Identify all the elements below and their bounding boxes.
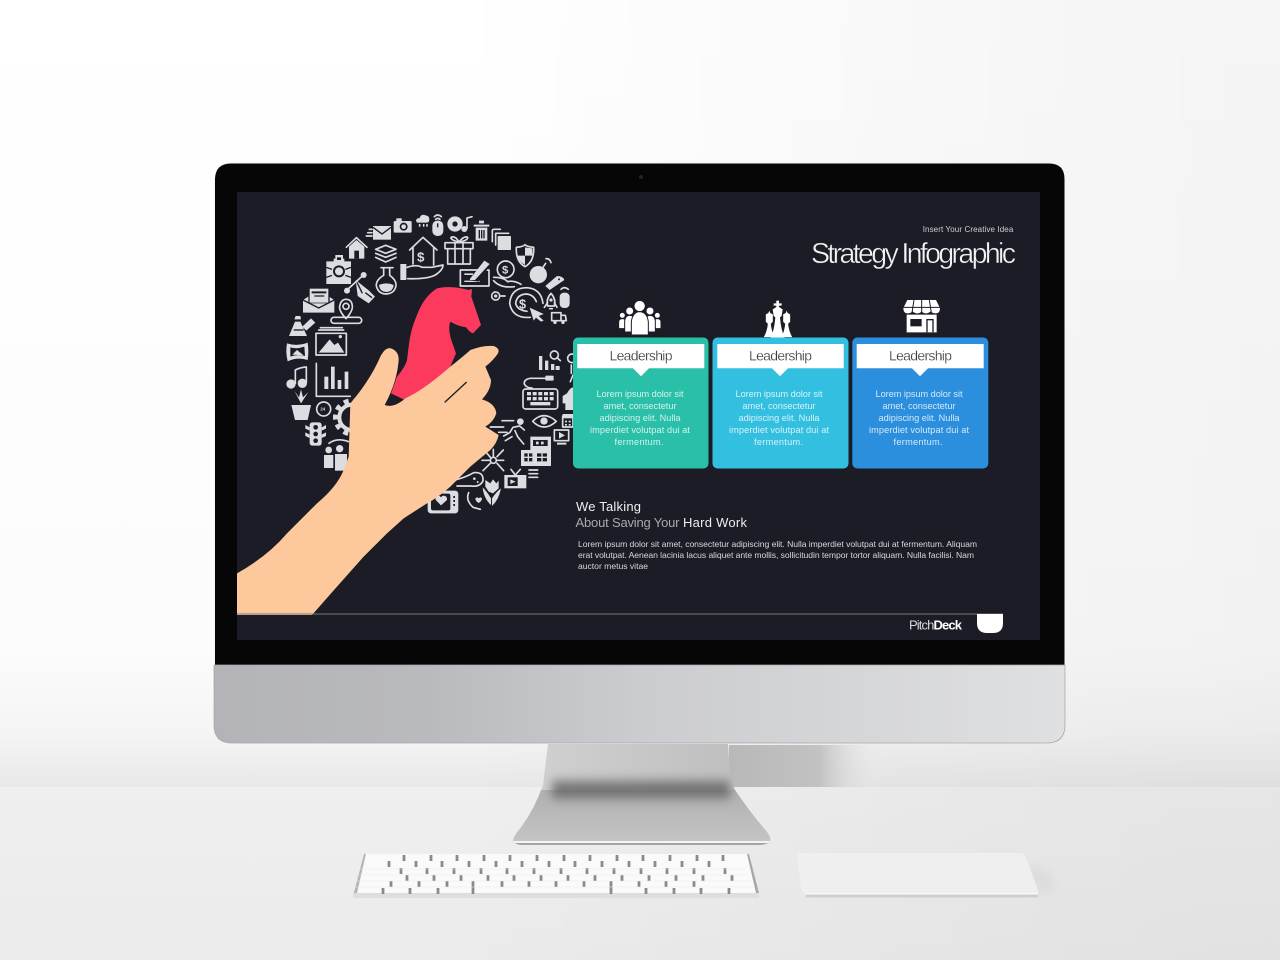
icon: small flask and ticket — [289, 316, 315, 336]
icon: house with dollar in hand — [400, 237, 443, 280]
icon: home — [346, 238, 367, 259]
icon: flask — [376, 268, 396, 294]
footer badge — [977, 614, 1003, 633]
panel heading: Leadership — [610, 348, 673, 364]
icon: game controller — [455, 473, 483, 486]
panel body text: amet, consectetur — [882, 401, 956, 411]
panel: leadership blue — [852, 338, 988, 468]
icon: light burst — [482, 449, 504, 471]
icon: open envelope — [303, 287, 334, 313]
panel body text: amet, consectetur — [604, 401, 676, 411]
paragraph text: Lorem ipsum dolor sit amet, consectetur adipiscing elit. Nulla imperdiet volutpat dui at fermentum. Aliquam — [578, 539, 977, 549]
monitor stand — [513, 744, 770, 845]
panel body text: fermentum. — [754, 437, 803, 447]
panel body text: adipiscing elit. Nulla — [878, 413, 960, 423]
icon: envelope with motion lines — [366, 226, 391, 240]
panel body text: imperdiet volutpat dui at — [869, 425, 969, 435]
icon: trash can — [474, 221, 489, 241]
icon: warped photo — [286, 343, 308, 361]
icon: tv with heart — [428, 491, 458, 513]
icon: phone and heart — [468, 493, 482, 509]
icon: gear with arrow — [492, 292, 505, 300]
icon: running man — [490, 418, 524, 444]
panel body text: Lorem ipsum dolor sit — [596, 389, 684, 399]
monitor chin — [214, 665, 1065, 743]
icon: buildings — [521, 437, 551, 466]
icon: 24 hour support: 24 — [320, 407, 326, 412]
subtitle: Insert Your Creative Idea: Insert Your Creative Idea — [923, 225, 1014, 234]
icon: map pin — [331, 299, 362, 323]
panel body text: imperdiet volutpat dui at — [590, 425, 690, 435]
hand holding knight — [237, 346, 499, 615]
heading: About Saving Your Hard Work: About Saving Your — [576, 515, 680, 530]
trackpad shadow — [1024, 864, 1054, 893]
icon: business people — [324, 440, 349, 471]
panel heading: Leadership — [889, 348, 952, 364]
icon: disc and note — [447, 216, 472, 232]
icon: traffic light — [305, 422, 326, 446]
desk surface — [0, 787, 1280, 960]
icon: chess pieces — [763, 301, 793, 338]
icon: 24 hour support — [317, 402, 331, 416]
trackpad — [797, 853, 1038, 898]
stand shadow on wall — [729, 745, 879, 787]
radial icon cloud — [286, 215, 576, 513]
chess knight — [391, 287, 481, 403]
panel body text: adipiscing elit. Nulla — [738, 413, 820, 423]
title: Strategy Infographic: Strategy Infographic — [811, 238, 1016, 270]
icon: bomb — [530, 259, 551, 283]
icon: folders — [492, 229, 511, 250]
icon: coin in hand: $ — [502, 265, 509, 277]
icon: photo camera box — [326, 255, 351, 284]
panel body text: fermentum. — [894, 437, 942, 447]
icon: layers — [376, 245, 396, 262]
icon: house with dollar in hand: $ — [417, 249, 425, 264]
panel body text: imperdiet volutpat dui at — [729, 425, 829, 435]
panel heading: Leadership — [749, 348, 812, 364]
icon: shield — [516, 245, 534, 267]
heading: About Saving Your Hard Work — [576, 515, 748, 530]
icon: eye — [533, 416, 556, 427]
footer line — [237, 614, 1003, 615]
icon: large gear — [335, 401, 369, 434]
panel body text: Lorem ipsum dolor sit — [876, 389, 963, 399]
icon: landscape picture — [316, 328, 346, 355]
panel body text — [729, 389, 829, 447]
icon: bar chart — [316, 363, 350, 396]
panel body text — [590, 389, 690, 447]
icon: tag — [545, 276, 564, 290]
icon: chef partial — [568, 354, 576, 382]
icon: pen tool — [344, 272, 375, 303]
key gaps — [383, 855, 732, 894]
icon: rocket — [544, 293, 557, 309]
icon: mouse two — [560, 288, 570, 308]
icon: team people — [619, 300, 661, 335]
panel: leadership cyan — [712, 338, 848, 468]
panel body text: adipiscing elit. Nulla — [600, 413, 681, 423]
icon: calendar — [563, 414, 573, 427]
paragraph text — [578, 539, 977, 571]
panel body text — [869, 389, 969, 447]
panel body text: fermentum. — [614, 437, 664, 447]
label box — [577, 344, 704, 376]
icon: plant pot — [291, 389, 311, 420]
panel body text: Lorem ipsum dolor sit — [736, 389, 823, 399]
icon: chart with magnifier — [539, 351, 560, 370]
icon: dollar target with cursor — [510, 288, 544, 322]
webcam — [639, 175, 643, 179]
panel: leadership teal — [573, 338, 708, 468]
monitor body — [214, 163, 1065, 743]
paragraph text: auctor metus vitae — [578, 561, 648, 571]
icon: delivery van — [552, 313, 566, 324]
icon: gift box — [445, 237, 473, 264]
monitor bezel — [214, 163, 1065, 666]
keyboard — [353, 854, 759, 898]
icon: coin in hand — [494, 261, 521, 287]
icon: tulip flower — [483, 479, 501, 506]
icon: cloud — [416, 215, 429, 226]
footer logo: PitchDeck: PitchDeck — [909, 618, 963, 632]
icon: dollar target with cursor: $ — [519, 298, 526, 312]
icon: figure partial — [563, 387, 573, 410]
icon: camera — [394, 218, 412, 233]
label box — [717, 344, 844, 376]
icon: music note — [286, 367, 307, 389]
icon: market store — [903, 300, 940, 332]
panel body text: amet, consectetur — [742, 401, 816, 411]
heading: We Talking: We Talking — [576, 499, 641, 514]
heading: About Saving Your Hard Work: Hard Work — [683, 515, 748, 530]
icon: small screen with play — [554, 430, 569, 445]
slide screen — [237, 192, 1040, 640]
icon: retro tv — [504, 469, 538, 488]
label box — [857, 344, 984, 376]
icon: keyboard — [523, 376, 558, 409]
icon: wireless mouse — [432, 215, 443, 236]
paragraph text: erat volutpat. Aenean lacinia lacus aliquet ante mollis, sollicitudin tempor tortor aliquam. Nulla facilisi. Nam — [578, 550, 974, 560]
icon: check and pen — [460, 261, 490, 286]
